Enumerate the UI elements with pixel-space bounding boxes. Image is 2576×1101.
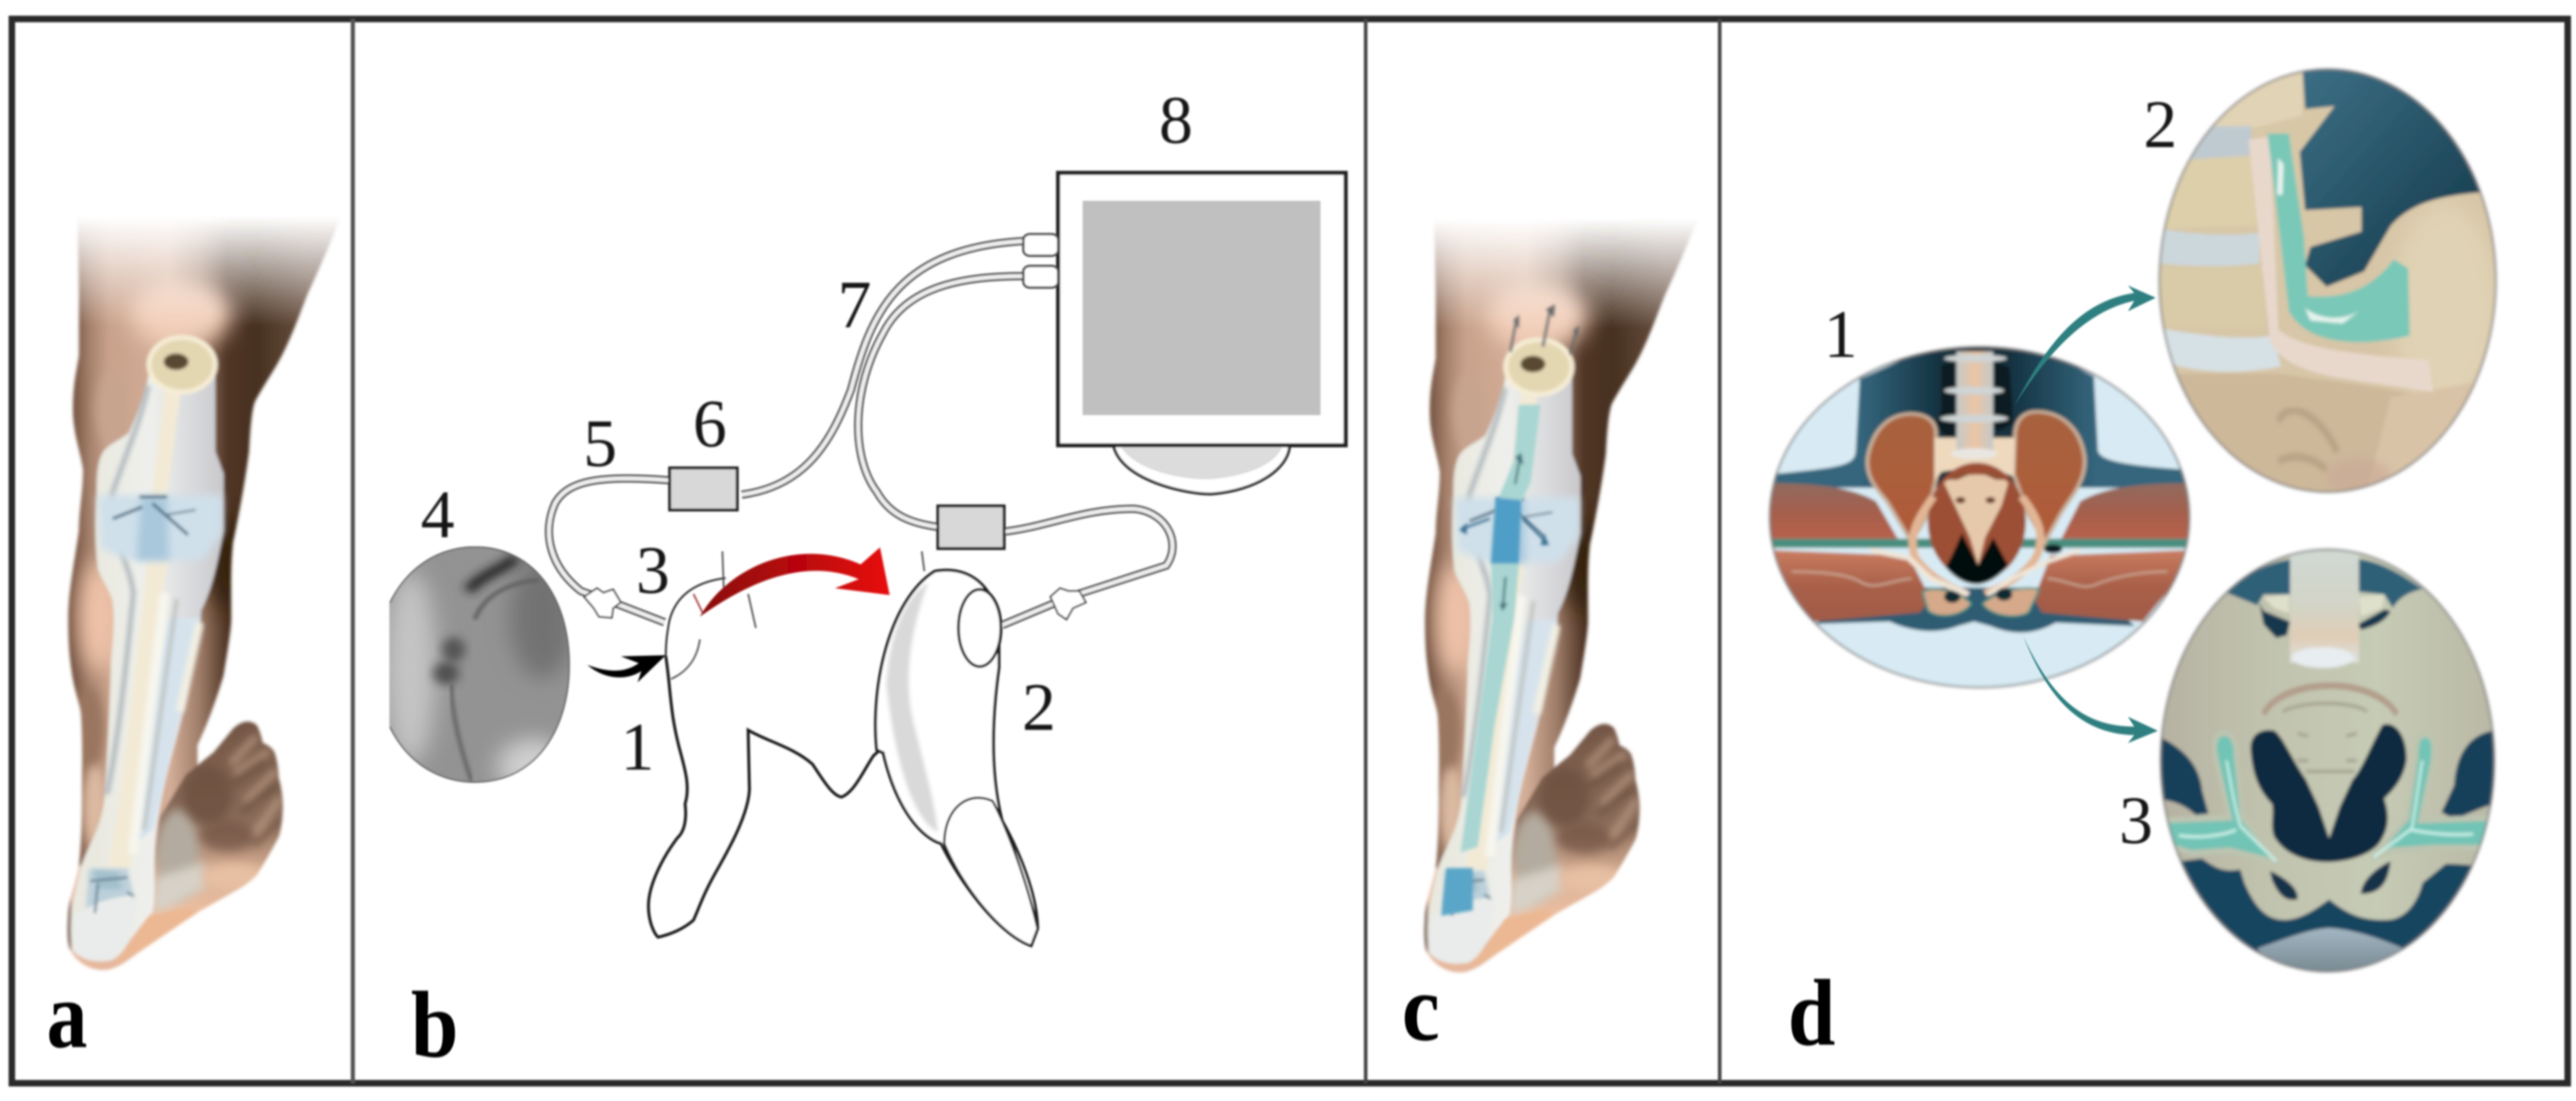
tubing 7, lower line [858,266,1172,625]
numeral 2: 2 [1022,669,1056,745]
pressure transducer boxes [669,468,1004,548]
incision marks [671,551,924,679]
numeral 6: 6 [693,386,727,461]
stopcock connectors [584,588,1086,620]
leg illustration a [59,196,356,978]
flow overlay in green and blue [1442,304,1579,915]
numeral 5: 5 [584,406,617,481]
numeral 4: 4 [421,477,454,552]
label c: c [1402,955,1440,1061]
femoral cut ellipse [958,589,1001,666]
numeral 1: 1 [620,709,655,784]
numeral 8: 8 [1159,82,1193,158]
numeral 7: 7 [837,267,872,342]
thigh shading [887,583,938,832]
oval 3: sacral and hip canals enlargement [2158,548,2497,976]
rabbit right part with shaved thigh [875,570,1038,946]
tubing 5 and 7, upper line [549,234,1058,623]
x-ray image [388,545,572,784]
numeral 1 in panel d: 1 [1824,296,1857,372]
panel a: leg with fascia [47,196,356,1068]
numeral 3: 3 [636,532,670,608]
numeral 2 in panel d: 2 [2143,87,2178,162]
inner leg [944,798,1038,946]
panel d: pelvis with three ovals [1767,60,2504,1065]
label b: b [411,972,458,1077]
monitor [1058,173,1346,494]
oval 1: pelvis and thigh muscles [1767,344,2195,692]
numeral 3 in panel d: 3 [2119,783,2153,858]
rabbit left part outline [648,578,880,937]
label d: d [1788,960,1835,1065]
panel c: leg with contrast flow [1402,198,1713,1061]
set-up drawing [381,173,1346,946]
teal arrow to oval 2 [2014,286,2156,406]
teal arrow to oval 3 [2023,636,2158,743]
leg illustration c [1416,198,1713,981]
red transplant arrow [700,547,890,617]
panel b: rabbit perfusion set-up [381,82,1346,1077]
black arrow [587,655,666,682]
label a: a [47,963,87,1068]
oval 2: lumbar canal enlargement [2155,60,2504,501]
